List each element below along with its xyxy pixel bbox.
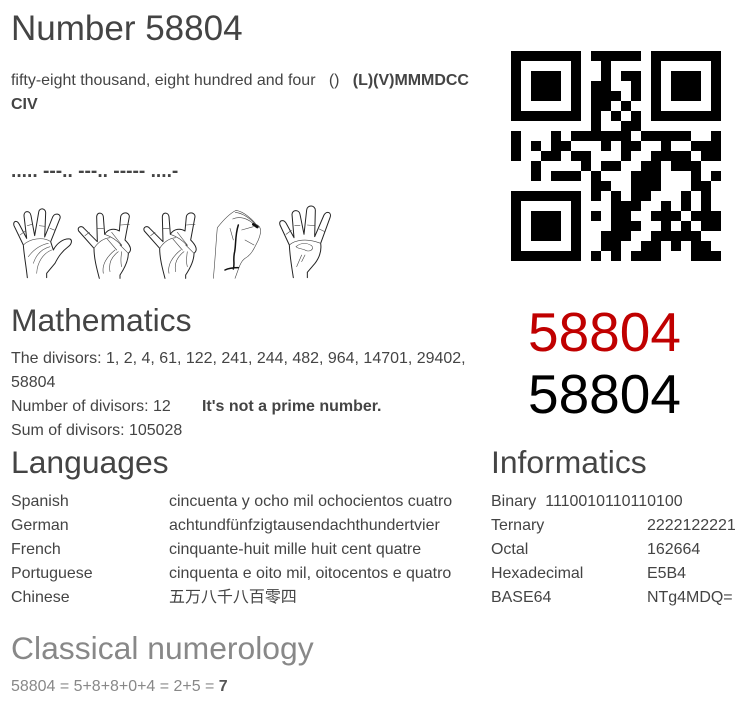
icon: QR code [511,51,721,261]
panel: informatics table: Hexadecimal [491,565,583,582]
heading: Classical numerology: Classical numerology [11,630,314,666]
heading: Languages: Languages [11,444,169,480]
number in words and roman numeral: fifty-eight thousand, eight hundred and four () (L)(V)MMMDCC CIV [11,72,469,113]
heading: Informatics: Informatics [491,444,647,480]
panel: languages table: cinquante-huit mille huit cent quatre [169,541,421,558]
heading: Mathematics: Mathematics [11,302,192,338]
panel: languages table: French [11,541,61,558]
panel: languages table: Spanish [11,493,69,510]
panel: informatics table: E5B4 [647,565,686,582]
number of divisors: Number of divisors: 12 [11,398,171,415]
title: Number 58804 [11,9,243,48]
panel: informatics table: Ternary [491,517,544,534]
panel: informatics table: Binary 1110010110110100 [491,493,683,510]
panel: languages table [11,493,452,606]
numerology sum: 58804 = 5+8+8+0+4 = 2+5 = 7 [11,678,228,695]
panel: languages table: achtundfünfzigtausendachthundertvier [169,517,440,534]
icon: sign language hands [13,206,331,279]
panel: informatics table: NTg4MDQ= [647,589,733,606]
black number: 58804 [528,363,681,425]
panel: languages table: cinquenta e oito mil, oitocentos e quatro [169,565,451,582]
panel: languages table: German [11,517,69,534]
panel: informatics table: BASE64 [491,589,551,606]
prime statement: It's not a prime number. [202,398,381,415]
panel: informatics table: Octal [491,541,528,558]
panel: languages table: cincuenta y ocho mil ochocientos cuatro [169,493,452,510]
panel: languages table: Chinese [11,589,70,606]
red number: 58804 [528,301,681,363]
panel: mathematics text [11,350,466,439]
panel: informatics table: 2222122221 [647,517,736,534]
sum of divisors: Sum of divisors: 105028 [11,422,182,439]
morse code: ..... ---.. ---.. ----- ....- [11,161,178,182]
panel: languages table: Portuguese [11,565,93,582]
panel: informatics table: 162664 [647,541,700,558]
panel: languages table: 五万八千八百零四 [169,589,297,606]
divisors list: The divisors: 1, 2, 4, 61, 122, 241, 244, 482, 964, 14701, 29402, 58804 [11,350,466,391]
panel: informatics table [491,493,736,606]
